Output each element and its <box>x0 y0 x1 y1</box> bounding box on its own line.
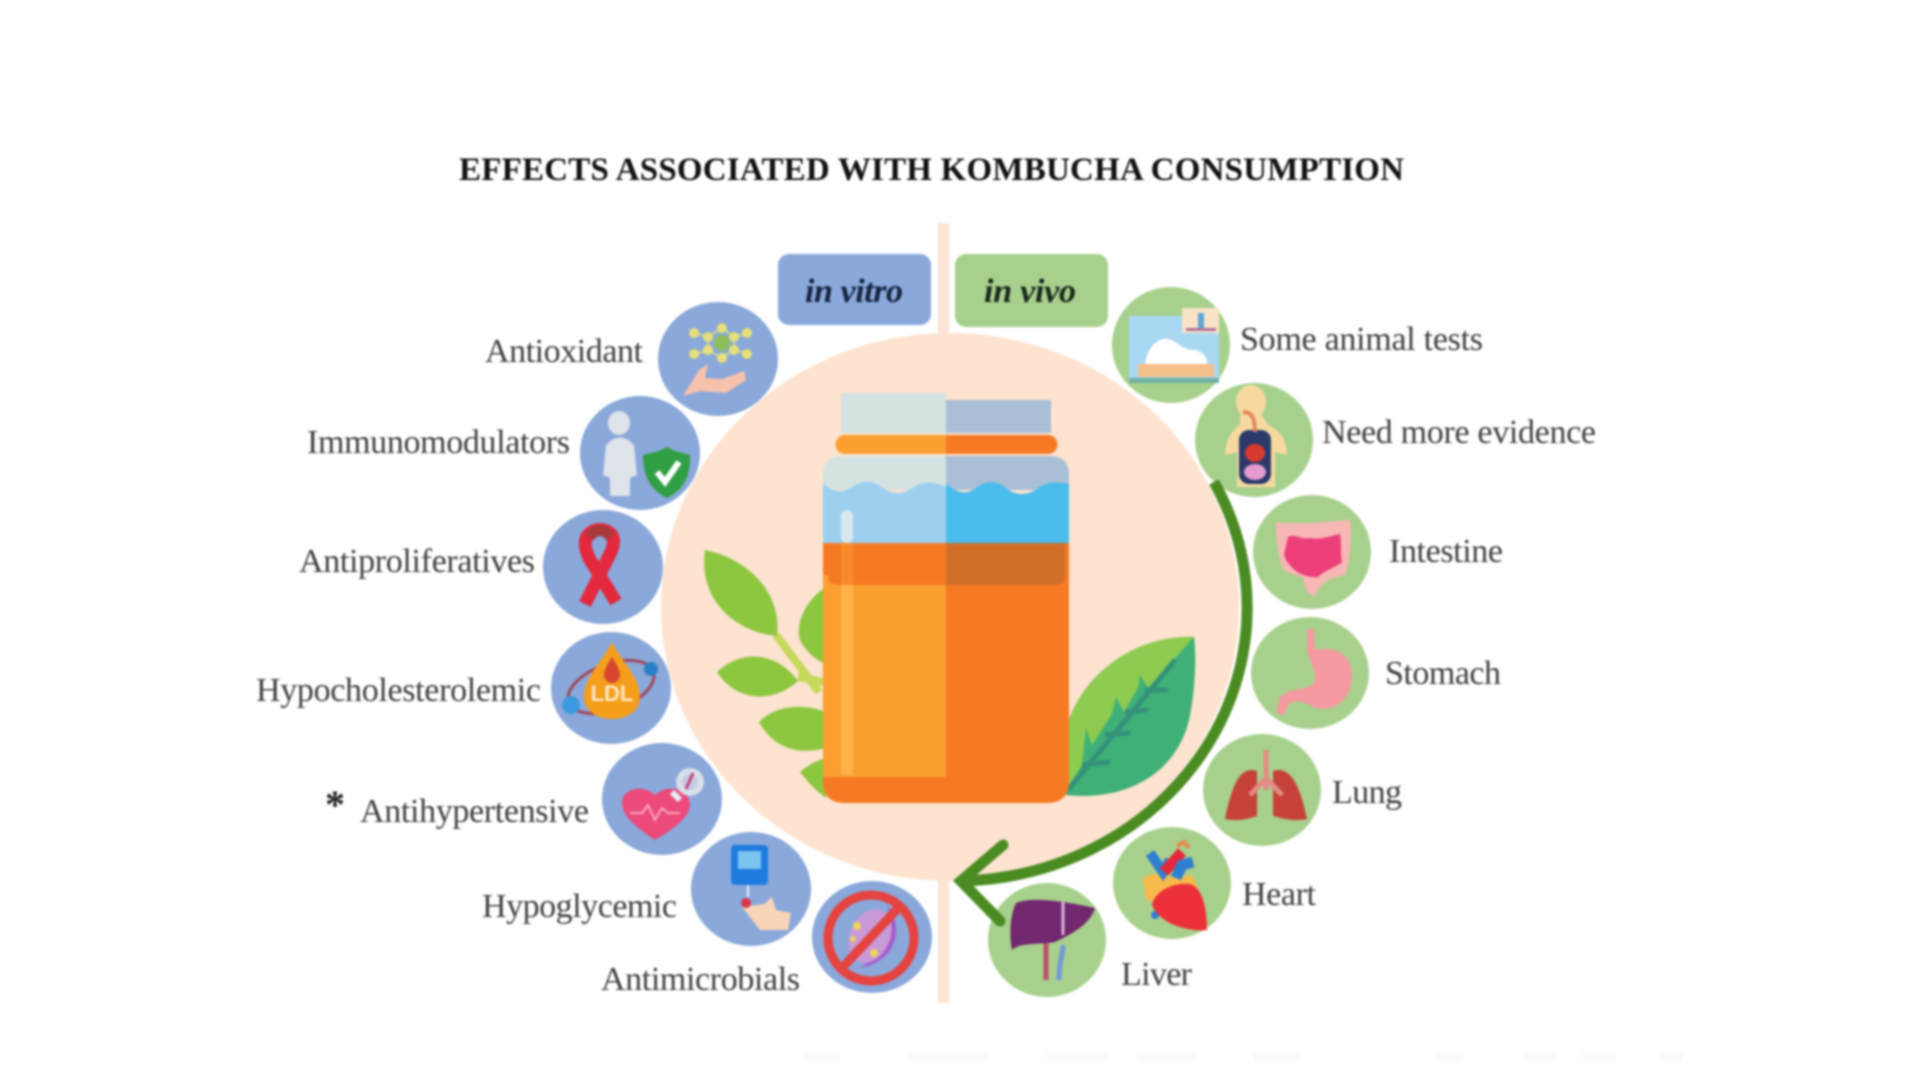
icon circle: some animal tests <box>1112 287 1230 403</box>
icon circle: lung <box>1203 734 1321 846</box>
icon circle: intestine <box>1253 495 1371 609</box>
vertical divider between in vitro and in vivo <box>938 223 949 1003</box>
label: Need more evidence: Need more evidence <box>1322 414 1596 451</box>
jar water right <box>946 482 1069 543</box>
icon circle: heart <box>1113 827 1231 939</box>
kombucha jar <box>823 393 1069 803</box>
icon circle: antiproliferatives <box>543 510 663 624</box>
badge: in vivo: in vivo <box>984 273 1076 310</box>
icon circle: stomach <box>1251 617 1369 729</box>
label: Lung: Lung <box>1332 774 1402 811</box>
label: Antihypertensive: Antihypertensive <box>360 793 589 830</box>
label: Intestine: Intestine <box>1389 533 1503 570</box>
icon circle: hypocholesterolemic: LDL <box>591 681 633 706</box>
title: EFFECTS ASSOCIATED WITH KOMBUCHA CONSUMPTION <box>459 152 1404 188</box>
right leaf <box>1066 637 1195 796</box>
icon circle: hypocholesterolemic <box>551 632 671 744</box>
label: Liver: Liver <box>1121 956 1193 993</box>
icon circle: liver <box>988 883 1106 997</box>
label: Antiproliferatives: Antiproliferatives <box>299 543 535 580</box>
central peach circle <box>661 333 1239 881</box>
icon circle: antioxidant <box>658 302 778 416</box>
icon circle: hypoglycemic <box>691 832 811 946</box>
jar highlight <box>841 510 853 543</box>
jar band <box>836 435 946 454</box>
icon circle: antimicrobials <box>812 881 932 993</box>
jar upper glass <box>823 456 946 490</box>
label: Hypoglycemic: Hypoglycemic <box>482 888 677 925</box>
icon circle: need more evidence <box>1195 383 1313 497</box>
icon circle: immunomodulators <box>580 396 700 510</box>
label: Antimicrobials: Antimicrobials <box>601 961 800 998</box>
icon circle: antihypertensive <box>602 743 722 855</box>
jar liquid <box>823 543 946 803</box>
label: Stomach: Stomach <box>1385 655 1501 692</box>
label: Antioxidant: Antioxidant <box>485 333 644 370</box>
label: Hypocholesterolemic: Hypocholesterolemic <box>256 672 541 709</box>
badge: in vivo <box>955 254 1108 327</box>
badge: in vitro: in vitro <box>805 273 903 310</box>
jar water left <box>823 482 946 543</box>
label: Immunomodulators: Immunomodulators <box>307 424 570 461</box>
label: Heart: Heart <box>1242 876 1317 913</box>
label: Some animal tests: Some animal tests <box>1240 321 1483 358</box>
badge: in vitro <box>778 254 931 325</box>
jar lid <box>841 393 946 433</box>
asterisk: * <box>325 782 345 827</box>
left leaves sprig <box>704 550 826 798</box>
green curved arrow <box>960 482 1247 921</box>
